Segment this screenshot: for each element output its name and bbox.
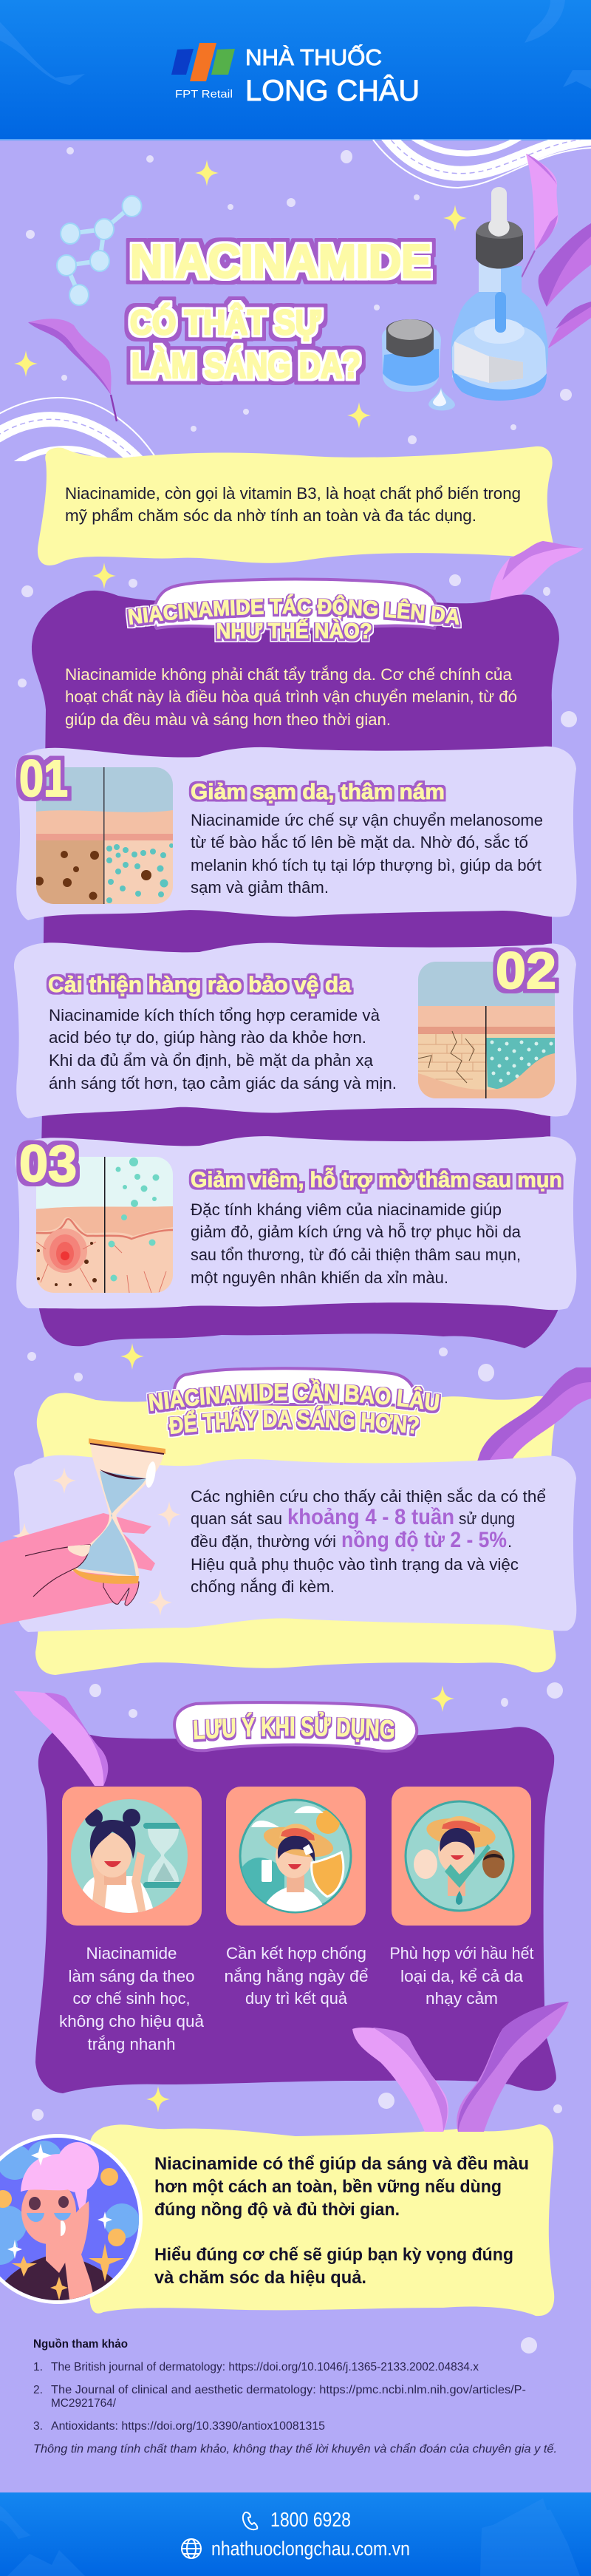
heading: timing: ĐỂ THẤY DA SÁNG HƠN? — [166, 1404, 421, 1438]
text: timing: đều đặn, thường với — [191, 1532, 336, 1551]
references: The British journal of dermatology: https://doi.org/10.1046/j.1365-2133.2002.04834.x — [51, 2361, 479, 2373]
text: card 02: ánh sáng tốt hơn, tạo cảm giác da sáng và mịn. — [49, 1074, 397, 1092]
icon: hand holding hourglass — [0, 1438, 181, 1625]
text: card 03: giảm đỏ, giảm kích ứng và hỗ trợ phục hồi da — [191, 1223, 522, 1241]
text: mechanism intro — [65, 665, 517, 729]
decorative stars — [14, 160, 467, 2113]
text: timing: sử dụng — [459, 1509, 515, 1528]
references: 1. — [33, 2361, 43, 2373]
heading: mechanism: NHƯ THẾ NÀO? — [214, 617, 374, 643]
leaves: hero right — [522, 154, 591, 348]
website: nhathuoclongchau.com.vn — [211, 2538, 410, 2560]
text: timing: chống nắng đi kèm. — [191, 1577, 335, 1596]
panel: timing inner card — [14, 1455, 576, 1632]
text: mechanism intro: Niacinamide không phải chất tẩy trắng da. Cơ chế chính của — [65, 665, 513, 684]
text: card 02: Niacinamide kích thích tổng hợp ceramide và — [49, 1006, 380, 1024]
logo: FPT Retail: FPT Retail — [175, 88, 233, 101]
text: note columns: nắng hằng ngày để — [225, 1967, 368, 1985]
text: note columns — [59, 1944, 533, 2053]
text: card 01: melanin khó tích tụ tại lớp thượng bì, giúp da bớt — [191, 856, 542, 874]
text: card 03: một nguyên nhân khiến da xỉn màu. — [191, 1268, 448, 1287]
heading: card 02: Cải thiện hàng rào bảo vệ da — [48, 973, 351, 997]
text: note columns: không cho hiệu quả — [59, 2012, 205, 2030]
text: card 01: sạm và giảm thâm. — [191, 878, 329, 897]
illustration: acne and inflammation — [36, 1157, 173, 1293]
heading: notes: LƯU Ý KHI SỬ DỤNG — [192, 1711, 395, 1746]
panel: card 02 — [14, 942, 576, 1118]
leaf: hero left — [28, 319, 117, 421]
text: note columns: làm sáng da theo — [68, 1967, 195, 1985]
icon: globe — [182, 2539, 201, 2558]
text: note columns: cơ chế sinh học, — [72, 1989, 191, 2008]
text: card 02: acid béo tự do, giúp hàng rào da khỏe hơn. — [49, 1028, 366, 1047]
decorative top swirl — [0, 133, 591, 464]
text: card 03: Đặc tính kháng viêm của niacinamide giúp — [191, 1200, 502, 1219]
icon: serum bottle and jar — [382, 187, 548, 410]
brand name — [245, 44, 420, 107]
text: note columns: Phù hợp với hầu hết — [390, 1944, 533, 1962]
references: Nguồn tham khảo — [33, 2338, 128, 2351]
text: note columns: Niacinamide — [86, 1944, 177, 1962]
text: timing — [191, 1487, 546, 1596]
panel: conclusion — [90, 2124, 554, 2316]
text: mechanism intro: giúp da đều màu và sáng hơn theo thời gian. — [65, 710, 391, 729]
text: conclusion: và chăm sóc da hiệu quả. — [154, 2268, 366, 2288]
leaves: notes bottom right — [352, 2002, 569, 2132]
illustration: woman with eye patches — [0, 2134, 148, 2306]
text: card 01: từ tế bào hắc tố lên bề mặt da. Nhờ đó, sắc tố — [191, 833, 528, 852]
references: Antioxidants: https://doi.org/10.3390/antiox10081315 — [51, 2420, 325, 2433]
text: card 02: Khi da đủ ẩm và ổn định, bề mặt da phản xạ — [49, 1051, 374, 1070]
card: note 3 — [392, 1787, 531, 1926]
building decoration — [0, 2498, 580, 2576]
text: timing: . — [508, 1532, 512, 1551]
footer band — [0, 2492, 591, 2576]
icon: molecule — [57, 196, 142, 305]
text: card 02 — [49, 1006, 397, 1092]
text: card 03 — [191, 1200, 522, 1287]
brand name: NHÀ THUỐC — [245, 44, 382, 70]
text: note columns: trắng nhanh — [87, 2035, 176, 2053]
text: timing: Hiệu quả phụ thuộc vào tình trạng da và việc — [191, 1555, 519, 1574]
text: timing: quan sát sau — [191, 1509, 282, 1528]
text: conclusion: hơn một cách an toàn, bền vững nếu dùng — [154, 2177, 502, 2197]
panel: notes background — [35, 1727, 556, 2093]
heading: card 03: Giảm viêm, hỗ trợ mờ thâm sau mụn — [191, 1167, 562, 1192]
leaf: section 1 — [490, 541, 584, 602]
leaf: notes left — [14, 1691, 108, 1786]
text: note columns: nhạy cảm — [426, 1989, 498, 2008]
icon: phone — [243, 2512, 257, 2529]
panel: card 03 — [16, 1135, 576, 1310]
references: MC2921764/ — [51, 2397, 117, 2410]
card: note 2 — [226, 1787, 366, 1926]
text: conclusion: Hiểu đúng cơ chế sẽ giúp bạn kỳ vọng đúng — [154, 2245, 513, 2265]
heading: card 01: Giảm sạm da, thâm nám — [191, 780, 445, 804]
text: timing: khoảng 4 - 8 tuần — [287, 1505, 454, 1529]
references: The Journal of clinical and aesthetic dermatology: https://pmc.ncbi.nlm.nih.gov/articles/P- — [51, 2384, 526, 2396]
heading: mechanism — [126, 578, 462, 643]
heading: notes — [173, 1701, 418, 1753]
heading: timing — [146, 1367, 442, 1438]
card: note 1 — [62, 1787, 202, 1926]
references: 2. — [33, 2384, 43, 2396]
panel: intro: Niacinamide, còn gọi là vitamin B3, là hoạt chất phổ biến trong — [65, 484, 521, 503]
heading: timing: NIACINAMIDE CẦN BAO LÂU — [146, 1378, 442, 1415]
text: conclusion — [154, 2154, 529, 2288]
references: 3. — [33, 2420, 43, 2433]
logo: FPT Retail — [171, 43, 235, 101]
text: card 01 — [191, 811, 543, 897]
number 02: 02 — [496, 942, 556, 999]
illustration: man with sunscreen — [240, 1806, 344, 1922]
illustration: people and skin types — [414, 1815, 505, 1905]
text: conclusion: Niacinamide có thể giúp da sáng và đều màu — [154, 2154, 529, 2174]
text: timing: Các nghiên cứu cho thấy cải thiện sắc da có thể — [191, 1487, 546, 1506]
title: LÀM SÁNG DA? — [131, 346, 361, 386]
header band — [0, 0, 591, 140]
text: note columns: duy trì kết quả — [245, 1989, 348, 2008]
number 01: 01 — [19, 750, 68, 807]
references: Thông tin mang tính chất tham khảo, không thay thế lời khuyên và chẩn đoán của chuyên gia y tế. — [33, 2443, 557, 2456]
text: mechanism intro: hoạt chất này là điều hòa quá trình vận chuyển melanin, từ đó — [65, 687, 517, 706]
text: conclusion: đúng nồng độ và đủ thời gian. — [154, 2200, 400, 2220]
panel: mechanism background — [32, 591, 561, 1348]
text: timing: nồng độ từ 2 - 5% — [341, 1528, 507, 1552]
text: note columns: loại da, kể cả da — [400, 1967, 524, 1985]
phone number: 1800 6928 — [270, 2508, 351, 2531]
illustration: skin barrier — [418, 962, 555, 1098]
text: note columns: Cần kết hợp chống — [226, 1944, 366, 1962]
panel: intro: mỹ phẩm chăm sóc da nhờ tính an toàn và đa tác dụng. — [65, 506, 476, 525]
heading: mechanism: NIACINAMIDE TÁC ĐỘNG LÊN DA — [126, 594, 462, 628]
illustration: woman and hourglass — [83, 1809, 181, 1913]
panel: intro — [38, 446, 555, 565]
illustration: melanin comparison — [35, 767, 174, 904]
title: CÓ THẬT SỰ — [130, 303, 321, 341]
number 03: 03 — [19, 1135, 77, 1192]
panel: card 01 — [16, 747, 576, 920]
text: card 03: sau tổn thương, từ đó cải thiện thâm sau mụn, — [191, 1245, 521, 1264]
title: NIACINAMIDE — [130, 236, 431, 288]
brand name: LONG CHÂU — [245, 74, 420, 107]
text: card 01: Niacinamide ức chế sự vận chuyển melanosome — [191, 811, 543, 829]
panel: timing background — [35, 1393, 556, 1675]
leaf: timing — [476, 1367, 591, 1464]
title — [130, 236, 431, 386]
references — [33, 2338, 557, 2456]
